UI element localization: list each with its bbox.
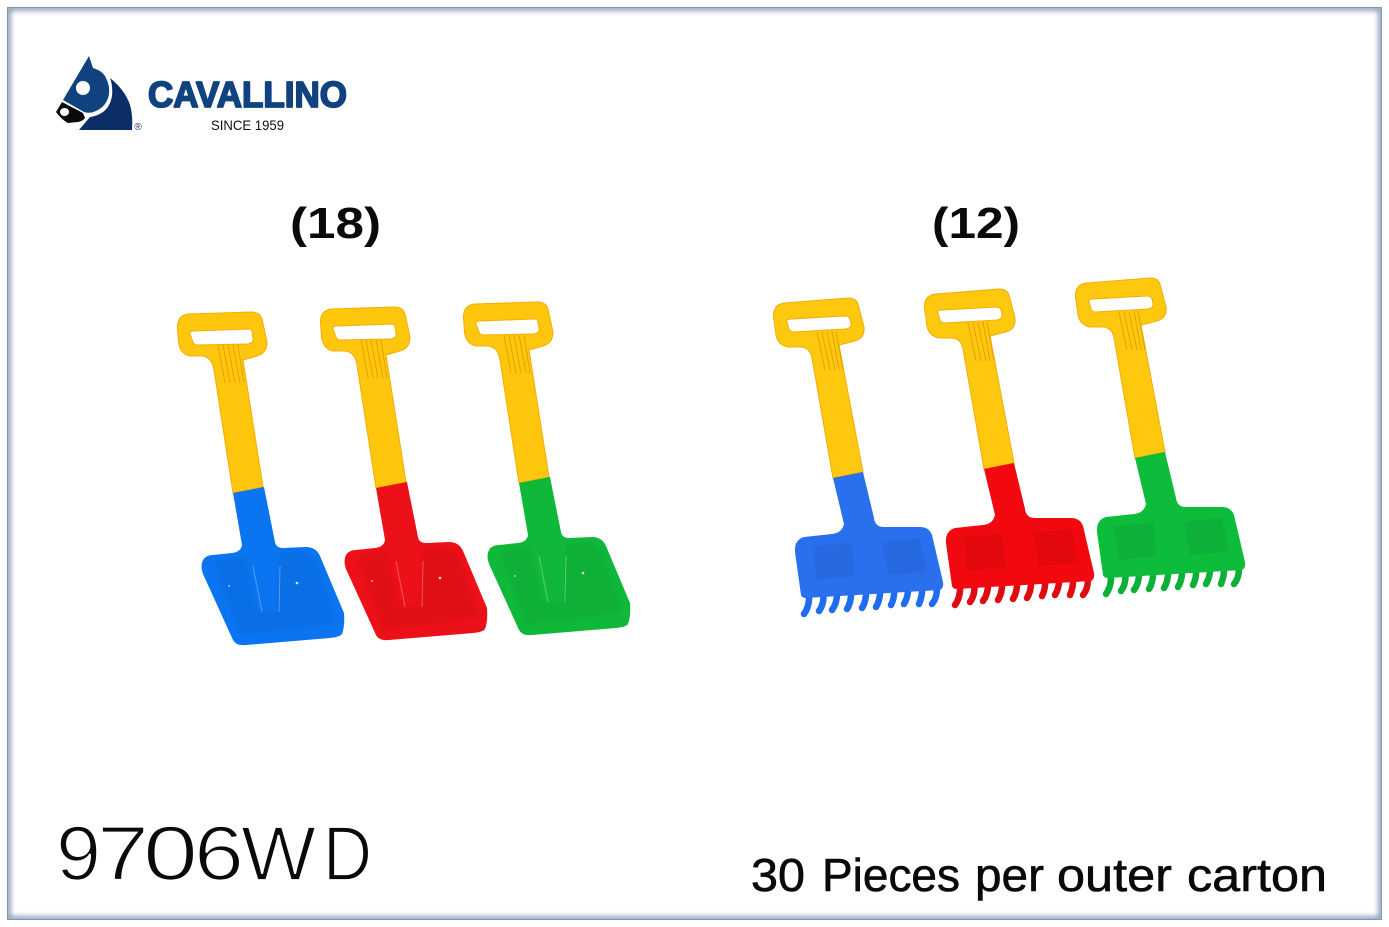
carton quantity: carton [1187, 849, 1327, 901]
carton quantity: per [975, 849, 1044, 901]
carton quantity: Pieces [822, 849, 960, 901]
red rake [924, 289, 1094, 605]
blue shovel [177, 312, 344, 645]
product code: W [241, 811, 316, 897]
shovel group [177, 302, 630, 645]
heading: rake count: (12) [932, 199, 1020, 248]
product code: 9 [56, 811, 101, 897]
tagline: SINCE 1959 [211, 117, 284, 133]
carton quantity: 30 [751, 849, 805, 901]
product code: 6 [194, 811, 244, 897]
green shovel [463, 302, 630, 635]
product code: D [323, 811, 372, 897]
green rake [1075, 278, 1245, 594]
carton quantity: outer [1057, 849, 1172, 901]
icon: horse head [56, 56, 132, 130]
logo: Cavallino [56, 56, 347, 133]
registered mark: ® [134, 122, 142, 133]
wordmark: CAVALLINO [148, 74, 347, 115]
blue rake [773, 298, 943, 614]
rake group [773, 278, 1245, 614]
red shovel [320, 307, 487, 640]
product code: 7 [97, 811, 149, 897]
heading: shovel count: (18) [290, 199, 381, 248]
product code: 0 [143, 811, 198, 897]
